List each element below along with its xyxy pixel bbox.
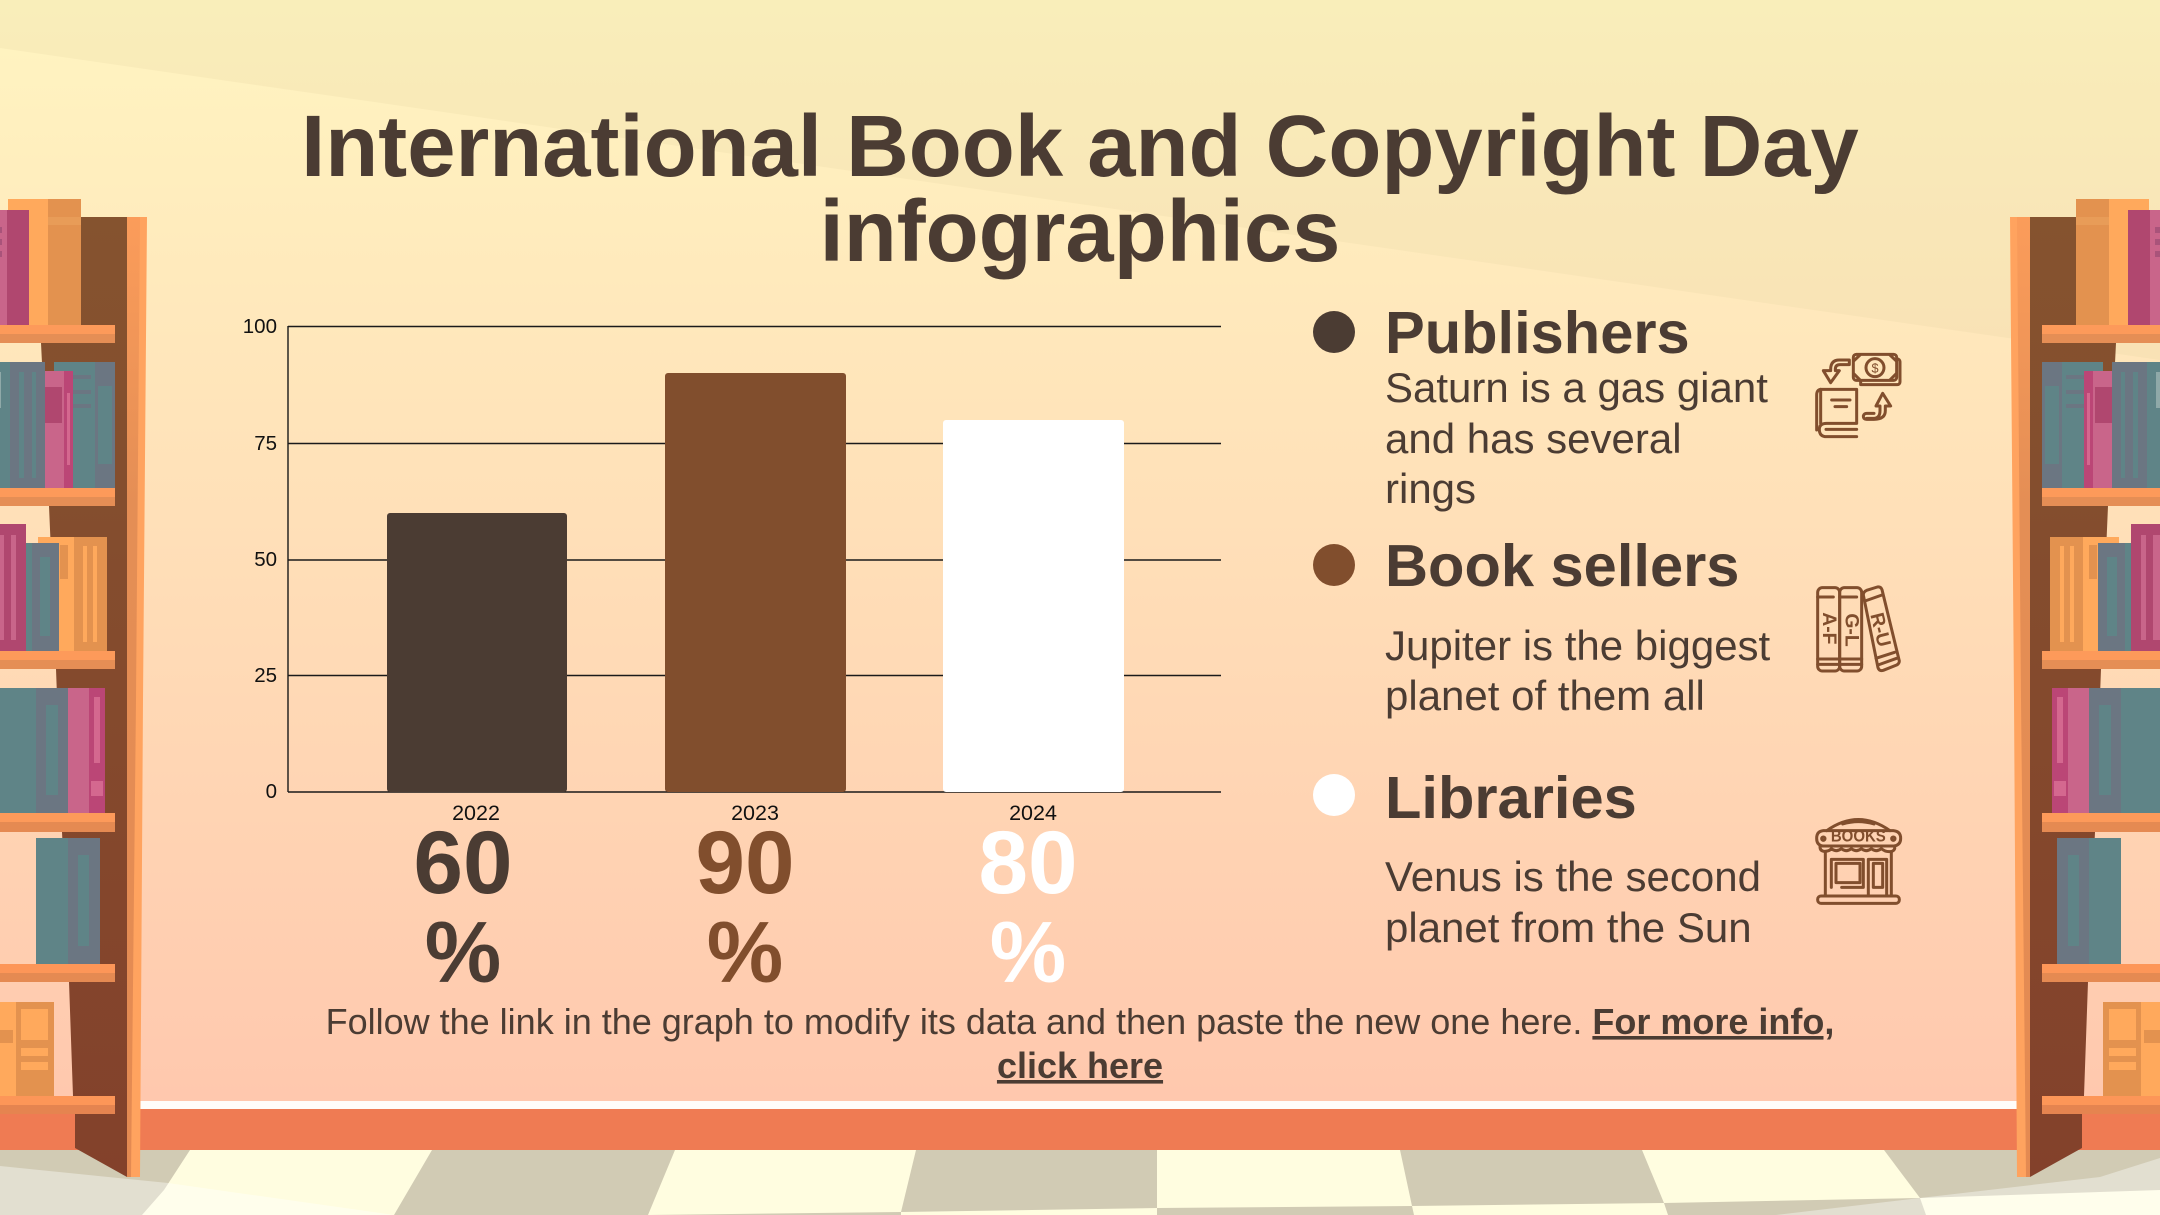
year labels: 2023	[731, 801, 779, 825]
legend: book sellers: Jupiter is the biggest	[1385, 622, 1771, 669]
bar chart	[243, 315, 1221, 825]
legend: publishers: rings	[1385, 465, 1476, 512]
floor light reflection right	[1776, 1158, 2160, 1215]
legend: publishers: Saturn is a gas giant	[1385, 364, 1768, 411]
year labels: 2022	[452, 801, 500, 825]
shelf 3 books	[0, 524, 107, 651]
footer note: Follow the link in the graph to modify its data and then paste the new one here. For more info,	[326, 1001, 1834, 1042]
shelves	[0, 325, 115, 1114]
legend: book sellers: planet of them all	[1385, 672, 1705, 719]
icon: alphabetical books: A-F	[1818, 612, 1839, 645]
left bookcase	[0, 199, 147, 1177]
legend: book sellers	[1313, 532, 1771, 719]
percent 90: 90	[696, 812, 794, 912]
icon: alphabetical books: R-U	[1865, 611, 1894, 649]
legend: libraries	[1313, 764, 1761, 951]
white baseboard strip	[0, 1101, 2160, 1109]
shelf 1 books	[0, 199, 81, 325]
legend: publishers	[1313, 299, 1768, 512]
grid lines and axis labels: 0	[266, 780, 277, 803]
legend: libraries: Libraries	[1385, 764, 1637, 831]
grid lines and axis labels: 50	[254, 548, 277, 571]
percent 80: %	[990, 905, 1066, 1001]
bar 2024	[943, 420, 1124, 792]
footer note: click here	[997, 1045, 1163, 1086]
year labels: 2024	[1009, 801, 1057, 825]
legend: publishers: and has several	[1385, 415, 1682, 462]
icon: money and book exchange: $	[1871, 361, 1879, 375]
case side post	[127, 217, 147, 1177]
grid lines and axis labels	[243, 315, 1221, 803]
shelf 6 books	[0, 1002, 54, 1096]
case back	[36, 217, 127, 1177]
percent 60: %	[425, 905, 501, 1001]
light ray band on wall	[0, 0, 2160, 360]
floor light reflection left	[0, 1166, 394, 1215]
icon: bookstore: BOOKS	[1831, 827, 1886, 846]
icon: bookstore	[1817, 819, 1901, 903]
bar 2023	[665, 373, 846, 792]
title: International Book and Copyright Day	[301, 98, 1859, 195]
year labels	[452, 801, 1057, 825]
icon: alphabetical books: G-L	[1841, 613, 1862, 647]
grid lines and axis labels: 100	[243, 315, 277, 338]
shelf 2 books	[0, 362, 115, 488]
grid lines and axis labels: 25	[254, 664, 277, 687]
icon: money and book exchange	[1817, 354, 1900, 437]
icon: alphabetical books	[1818, 587, 1899, 671]
legend: libraries: Venus is the second	[1385, 853, 1761, 900]
bar 2022	[387, 513, 567, 792]
legend: libraries: planet from the Sun	[1385, 904, 1752, 951]
percent 60: 60	[414, 812, 512, 912]
percent 90: %	[707, 905, 783, 1001]
right bookcase	[2010, 199, 2160, 1177]
grid lines and axis labels: 75	[254, 432, 277, 455]
checkered floor	[0, 1150, 2160, 1215]
legend: publishers: Publishers	[1385, 299, 1690, 366]
shelf 5 books	[36, 838, 100, 964]
orange baseboard	[0, 1109, 2160, 1150]
title: infographics	[820, 183, 1340, 280]
legend: book sellers: Book sellers	[1385, 532, 1739, 599]
shelf 4 books	[0, 688, 105, 813]
percent 80: 80	[978, 812, 1078, 912]
